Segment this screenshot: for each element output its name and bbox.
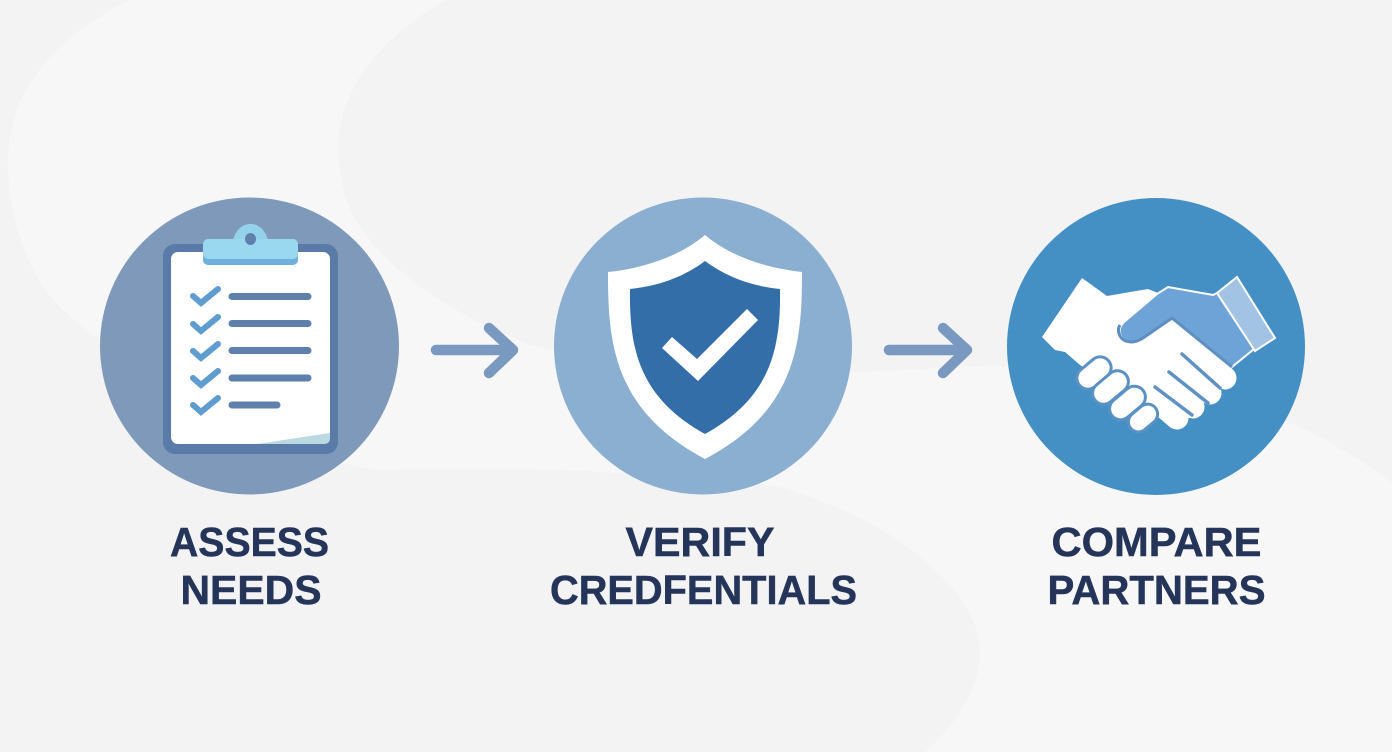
label: compare partners xyxy=(1048,519,1266,613)
label: assess needs: NEEDS xyxy=(180,567,322,613)
arrow: step 2 to step 3 xyxy=(889,328,967,373)
step 2: verify credentials xyxy=(550,198,857,613)
circle: assess background xyxy=(100,198,399,494)
circle: compare background xyxy=(1007,198,1305,495)
label: assess needs: ASSESS xyxy=(170,519,329,565)
label: verify credentials xyxy=(550,519,857,613)
checklist xyxy=(193,289,308,412)
icon: clipboard xyxy=(163,224,338,454)
label: verify credentials: VERIFY xyxy=(626,519,774,565)
step 1: assess needs xyxy=(100,198,399,613)
icon: handshake xyxy=(1042,277,1275,436)
icon: shield xyxy=(608,235,802,459)
label: compare partners: COMPARE xyxy=(1052,519,1262,565)
label: verify credentials: CREDFENTIALS xyxy=(550,567,857,613)
blue hand xyxy=(1120,287,1254,367)
label: assess needs xyxy=(170,519,329,613)
circle: verify background xyxy=(554,198,852,494)
left fingers xyxy=(1072,352,1162,436)
white hand xyxy=(1042,278,1232,425)
cuff xyxy=(1217,277,1275,351)
label: compare partners: PARTNERS xyxy=(1048,567,1266,613)
right fingers xyxy=(1142,348,1225,418)
step 3: compare partners xyxy=(1007,198,1305,613)
arrow: step 1 to step 2 xyxy=(436,328,513,373)
